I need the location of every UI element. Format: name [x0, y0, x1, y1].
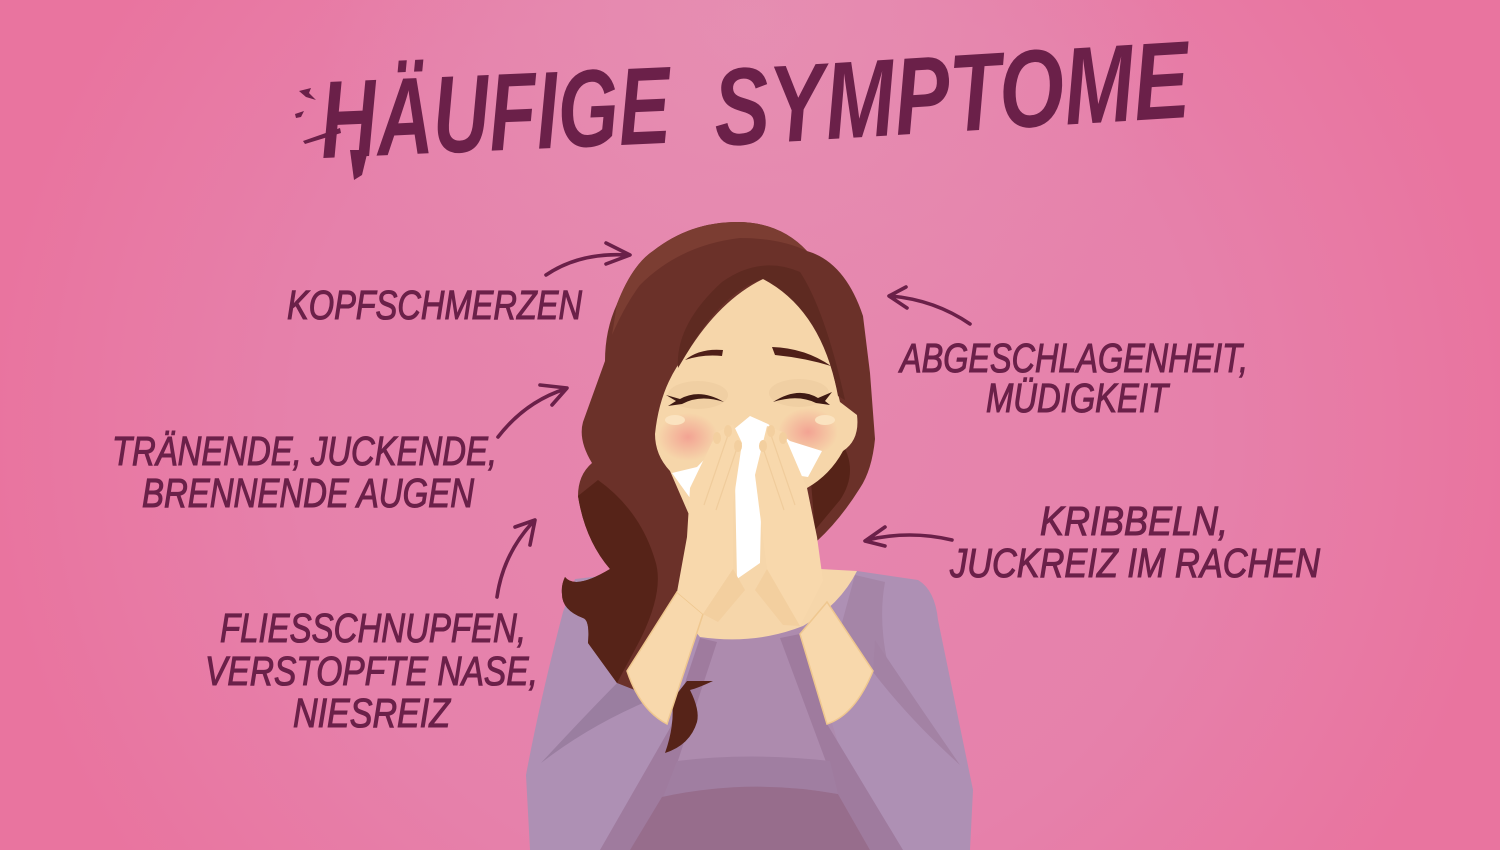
label: Tränende, juckende, brennende Augen: TRÄNENDE, JUCKENDE, — [112, 428, 497, 474]
finger lines and tips — [704, 425, 795, 510]
title: HÄUFIGE — [318, 44, 675, 182]
face — [655, 279, 857, 540]
blush cheeks — [658, 408, 838, 461]
left forearm and hand — [627, 424, 745, 724]
skin: neck and chest — [680, 520, 857, 639]
title: SYMPTOME — [710, 18, 1195, 170]
sweater — [526, 571, 973, 850]
label: Tränende, juckende, brennende Augen — [112, 428, 497, 516]
label: Abgeschlagenheit, Müdigkeit: MÜDIGKEIT — [986, 375, 1170, 421]
label: Kopfschmerzen: KOPFSCHMERZEN — [287, 282, 582, 328]
title — [303, 18, 1195, 182]
arrow: to throat — [865, 527, 952, 546]
label: Abgeschlagenheit, Müdigkeit — [898, 335, 1248, 421]
eyebrows — [685, 347, 831, 366]
icon: title spark marks — [295, 88, 316, 118]
label: Fließschnupfen, verstopfte Nase, Niesreiz: NIESREIZ — [293, 690, 452, 736]
hair fringe — [678, 265, 845, 400]
arrow: to nose — [497, 520, 535, 597]
arrow: to eyes — [498, 385, 567, 437]
tissue — [672, 416, 822, 579]
label: Kribbeln, Juckreiz im Rachen — [949, 498, 1320, 586]
label: Kribbeln, Juckreiz im Rachen: JUCKREIZ IM RACHEN — [949, 540, 1320, 586]
label: Fließschnupfen, verstopfte Nase, Niesreiz: FLIESSCHNUPFEN, — [220, 605, 526, 651]
label: Tränende, juckende, brennende Augen: BRENNENDE AUGEN — [142, 470, 474, 516]
right forearm and hand — [755, 426, 873, 724]
label: Abgeschlagenheit, Müdigkeit: ABGESCHLAGENHEIT, — [898, 335, 1248, 381]
label: Fließschnupfen, verstopfte Nase, Niesreiz: VERSTOPFTE NASE, — [205, 648, 538, 694]
label: Kribbeln, Juckreiz im Rachen: KRIBBELN, — [1040, 498, 1228, 544]
label: Fließschnupfen, verstopfte Nase, Niesreiz — [205, 605, 538, 736]
arrow: to head — [546, 243, 630, 275]
woman illustration — [526, 222, 973, 850]
eye sockets — [668, 379, 829, 409]
hair — [562, 222, 875, 753]
closed eyes — [666, 392, 832, 406]
arrow: to fatigue — [889, 287, 970, 324]
